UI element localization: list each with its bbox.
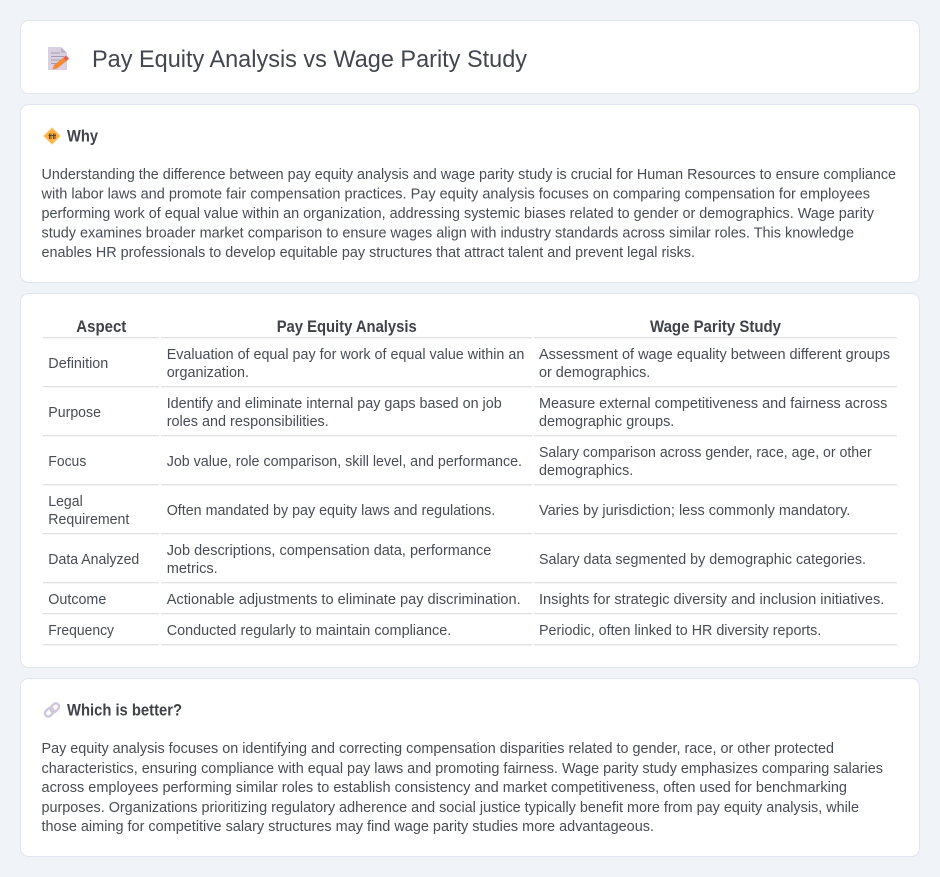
table row: legal requirement: Varies by jurisdiction; less commonly mandatory.: [539, 503, 850, 519]
text block: which is better paragraph: characteristics, ensuring compliance with equal pay laws and promoting fairness. Wage parity study emphasizes comparing salaries: [42, 760, 883, 777]
icon: link: [44, 702, 60, 718]
table row: legal requirement: Often mandated by pay equity laws and regulations.: [167, 503, 495, 519]
table row: focus: demographics.: [539, 463, 633, 479]
icon: children crossing sign: [44, 128, 60, 144]
table row: data analyzed: Job descriptions, compensation data, performance: [167, 543, 491, 559]
text block: why paragraph: enables HR professionals to develop equitable pay structures that attract talent and prevent legal risks.: [42, 244, 695, 261]
text block: why paragraph: Understanding the difference between pay equity analysis and wage parity study is crucial for Human Resources to ensure compliance: [42, 166, 896, 183]
table row: data analyzed: Data Analyzed: [48, 552, 139, 568]
text block: why paragraph: with labor laws and promote fair compensation practices. Pay equity analysis focuses on comparing compensation for employees: [41, 186, 870, 202]
table row: legal requirement: Requirement: [48, 512, 129, 528]
table row: purpose: Purpose: [48, 405, 101, 421]
table row: focus: [43, 445, 897, 485]
table row: focus: Job value, role comparison, skill level, and performance.: [167, 454, 522, 470]
table row: outcome: [43, 592, 897, 614]
table row: frequency: [43, 623, 897, 645]
icon: memo with pencil: [48, 47, 69, 70]
panel: comparison table: [20, 294, 920, 668]
table row: frequency: Frequency: [48, 623, 115, 639]
text block: which is better paragraph: Pay equity analysis focuses on identifying and correcting compensation disparities related to gender, race, or other protected: [42, 740, 834, 757]
table row: purpose: Identify and eliminate internal pay gaps based on job: [167, 396, 502, 412]
table row: definition: Definition: [48, 356, 108, 372]
table row: definition: Evaluation of equal pay for work of equal value within an: [167, 347, 524, 363]
title: Pay Equity Analysis vs Wage Parity Study: [92, 46, 528, 73]
text block: why paragraph: study examines broader market comparison to ensure wages align with industry standards across similar roles. This knowledge: [42, 224, 854, 242]
table header row: Wage Parity Study: [650, 318, 782, 336]
table header row: [43, 318, 897, 338]
table row: outcome: Insights for strategic diversity and inclusion initiatives.: [539, 592, 884, 608]
heading: why: Why: [67, 128, 99, 146]
table row: legal requirement: Legal: [48, 494, 83, 510]
table row: purpose: Measure external competitiveness and fairness across: [539, 396, 887, 412]
table row: legal requirement: [43, 494, 897, 534]
table row: frequency: Periodic, often linked to HR diversity reports.: [539, 623, 821, 639]
table row: definition: or demographics.: [539, 365, 650, 381]
table header row: Pay Equity Analysis: [277, 318, 417, 336]
table row: purpose: demographic groups.: [539, 414, 674, 430]
text block: which is better paragraph: [42, 740, 883, 835]
table row: frequency: Conducted regularly to maintain compliance.: [167, 623, 451, 639]
text block: why paragraph: performing work of equal value within an organization, addressing systemic biases related to gender or demographics. Wage parity: [42, 205, 874, 222]
table row: purpose: roles and responsibilities.: [167, 414, 329, 430]
table row: outcome: Outcome: [48, 592, 106, 608]
table row: focus: Focus: [48, 454, 86, 470]
table header row: Aspect: [76, 318, 127, 336]
heading: which is better: Which is better?: [67, 702, 182, 720]
text block: why paragraph: [41, 166, 896, 261]
table row: definition: Assessment of wage equality between different groups: [539, 347, 890, 363]
panel: header: [20, 20, 920, 94]
panel: why: [20, 104, 920, 282]
text block: which is better paragraph: purposes. Organizations prioritizing regulatory adherence and social justice typically benefit more from pay equity analysis, while: [42, 799, 859, 816]
text block: which is better paragraph: those aiming for competitive salary structures may find wage parity studies more advantageous.: [42, 818, 654, 835]
table row: data analyzed: Salary data segmented by demographic categories.: [539, 552, 866, 568]
table row: data analyzed: [43, 543, 897, 583]
text block: which is better paragraph: across employees performing similar roles to establish consistency and market competitiveness, often used for benchmarking: [42, 779, 847, 796]
table row: definition: organization.: [167, 365, 249, 381]
panel: which is better: [20, 678, 920, 856]
table row: data analyzed: metrics.: [167, 561, 218, 577]
table row: definition: [43, 347, 897, 387]
table row: focus: Salary comparison across gender, race, age, or other: [539, 445, 872, 461]
table row: purpose: [43, 396, 897, 436]
table row: outcome: Actionable adjustments to eliminate pay discrimination.: [167, 592, 521, 608]
